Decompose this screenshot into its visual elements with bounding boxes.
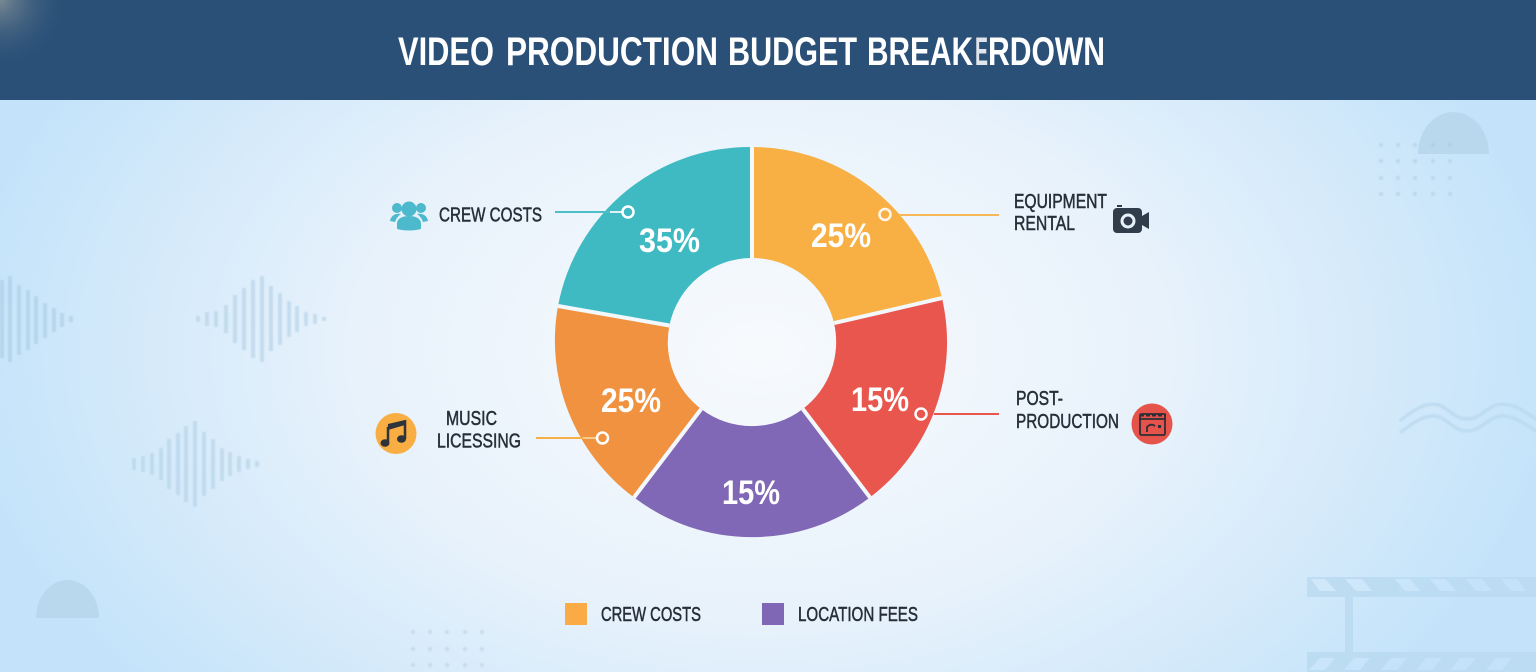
marker: [916, 408, 926, 420]
label: EQUIPMENT: [1014, 191, 1107, 213]
legend: [565, 603, 918, 626]
percentage labels: 25%: [811, 217, 871, 255]
decoration: dot grid bottom: [411, 630, 484, 667]
label: POST-: [1016, 388, 1063, 410]
callout: equipment rental: [880, 191, 1149, 235]
leader line: [934, 413, 999, 415]
marker: [597, 432, 608, 444]
legend item: crew costs: [565, 603, 701, 626]
leader line: [555, 211, 622, 213]
percentage labels: 35%: [639, 222, 700, 260]
percentage labels: 15%: [851, 381, 909, 419]
decoration: half circle top right: [1418, 112, 1489, 154]
legend item: location fees: LOCATION FEES: [798, 604, 918, 626]
legend item: crew costs: CREW COSTS: [601, 604, 701, 626]
icon: clapperboard: [1132, 404, 1172, 444]
label: MUSIC: [446, 408, 497, 430]
title: RDOWN: [988, 30, 1105, 74]
decoration: sound wave lower: [132, 421, 259, 507]
title: PRODUCTION: [506, 30, 718, 74]
percentage labels: 15%: [722, 474, 780, 512]
title: E: [975, 30, 988, 74]
segment separators: [558, 147, 942, 497]
callout: music licensing: LICESSING: [437, 430, 521, 452]
title: [398, 30, 1105, 74]
decoration: sound wave middle: [196, 276, 326, 362]
icon: camera: [1113, 205, 1149, 233]
leader line: [536, 437, 596, 439]
segment: crew costs: [558, 147, 752, 326]
marker: [622, 206, 634, 218]
title: BREAK: [867, 30, 973, 74]
decoration: film strip bottom right: [1307, 577, 1536, 672]
segment: music licensing: [555, 306, 701, 497]
icon: music note: [376, 413, 416, 454]
callout: post-production: [916, 388, 1172, 444]
title: BUDGET: [728, 30, 857, 74]
percentage labels: [601, 217, 909, 512]
donut chart: [555, 147, 947, 537]
header band: [0, 0, 1536, 100]
label: CREW COSTS: [439, 204, 542, 226]
icon: people: [390, 202, 428, 230]
legend item: location fees: [762, 603, 918, 626]
marker: [880, 209, 890, 220]
callout: music licensing: [376, 408, 608, 454]
decoration: sound wave left: [0, 276, 73, 362]
callout: crew costs: [390, 202, 634, 230]
callout: equipment rental: RENTAL: [1014, 213, 1075, 235]
title: VIDEO: [398, 30, 494, 74]
percentage labels: 25%: [601, 382, 661, 420]
leader line: [899, 214, 999, 216]
segment: equipment rental: [752, 147, 942, 323]
decoration: dot grid top right: [1379, 143, 1452, 196]
callout: post-production: PRODUCTION: [1016, 411, 1119, 433]
decoration: half circle bottom left: [36, 580, 99, 618]
segment: location fees: [634, 409, 870, 537]
decoration: wavy lines right: [1401, 404, 1536, 432]
segment: post-production: [803, 298, 947, 497]
